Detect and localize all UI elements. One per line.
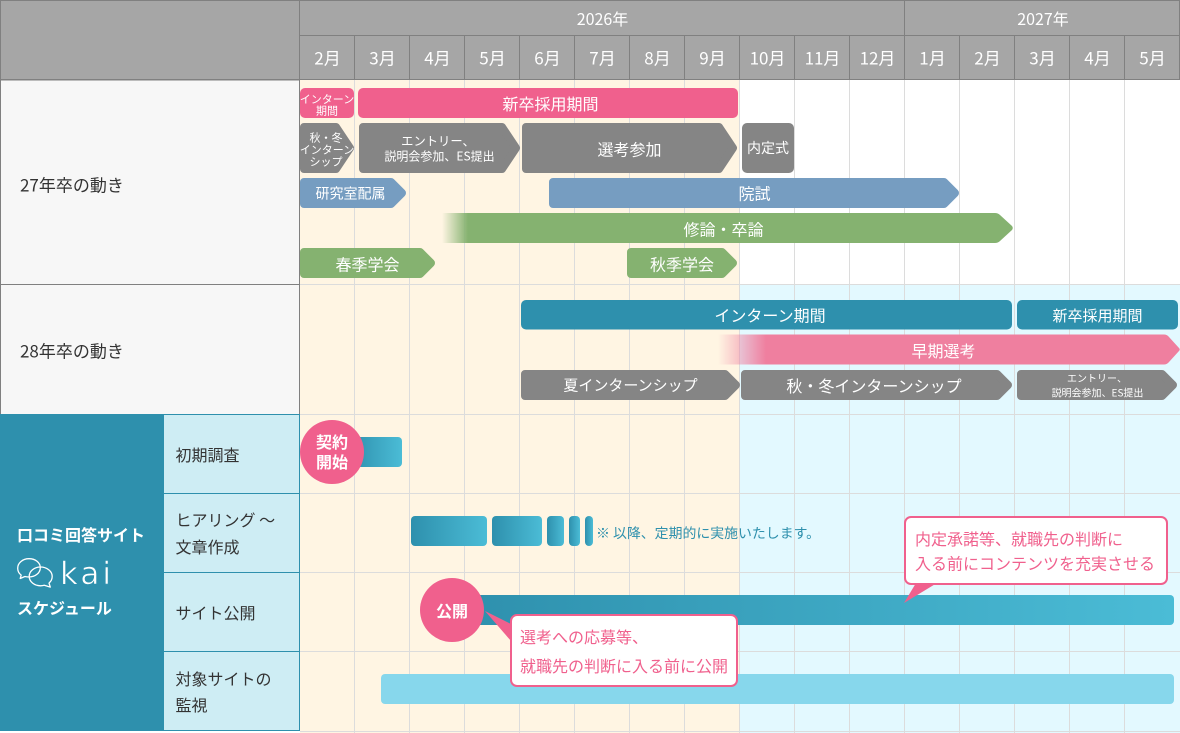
arrow: エントリー 説明会参加 27: エントリー、 — [401, 132, 475, 150]
table header: 6月 — [534, 44, 561, 70]
table header: 2月 — [974, 44, 1001, 70]
table header: 7月 — [589, 44, 616, 70]
panel: kai schedule task labels — [164, 414, 300, 731]
table header: 10月 — [750, 44, 785, 70]
row label: 28年卒の動き — [0, 284, 300, 414]
table header: 2026年 — [577, 6, 628, 30]
callout: 内定承諾等 — [904, 517, 1167, 603]
row label: 27年卒の動き — [0, 80, 300, 284]
bar: インターン期間 27 — [300, 88, 354, 118]
panel: kai schedule side label — [0, 414, 164, 731]
panel: kai schedule task labels: 監視 — [176, 692, 208, 716]
badge: 公開: 公開 — [436, 598, 468, 622]
callout: 選考への応募等: 就職先の判断に入る前に公開 — [520, 653, 728, 677]
arrow: 秋・冬インターンシップ 27: インターン — [300, 142, 354, 158]
arrow: 選考参加: 選考参加 — [597, 136, 662, 160]
arrow: 研究室配属 — [304, 182, 402, 204]
table header: 4月 — [424, 44, 451, 70]
arrow: 春季学会 — [304, 252, 431, 276]
bar: 監視 — [381, 674, 1174, 704]
icon: kai chat bubbles — [18, 559, 52, 587]
bar: 新卒採用期間 28: 新卒採用期間 — [1052, 305, 1143, 326]
arrow: 春季学会: 春季学会 — [335, 252, 400, 276]
bar: インターン期間 28: インターン期間 — [714, 302, 826, 326]
arrow: エントリー 説明会参加 28: 説明会参加、ES提出 — [1052, 384, 1143, 400]
callout: 選考への応募等: 選考への応募等、 — [520, 624, 648, 648]
panel: kai schedule side label: スケジュール — [17, 595, 112, 619]
callout: 内定承諾等: 内定承諾等、就職先の判断に — [915, 526, 1123, 550]
table header: 2月 — [314, 44, 341, 70]
table header: 3月 — [1029, 44, 1056, 70]
bar: インターン期間 27: インターン — [300, 91, 354, 107]
badge: 契約開始: 開始 — [316, 449, 348, 473]
arrow: 秋・冬インターンシップ 27: 秋・冬 — [310, 130, 342, 146]
arrow: 早期選考 — [718, 334, 1180, 364]
arrow: 秋・冬インターンシップ 28: 秋・冬インターンシップ — [786, 373, 962, 397]
bar: 新卒採用期間 27: 新卒採用期間 — [502, 91, 599, 115]
bar: インターン期間 27: 期間 — [316, 102, 338, 118]
panel: kai schedule task labels: 文章作成 — [176, 534, 240, 558]
arrow: 修論・卒論 — [442, 213, 1013, 243]
arrow: エントリー 説明会参加 28 — [1021, 370, 1173, 400]
bar: インターン期間 28 — [521, 300, 1012, 330]
row label: 28年卒の動き: 28年卒の動き — [20, 338, 124, 362]
table header: 4月 — [1084, 44, 1111, 70]
bar: サイト公開 — [460, 595, 1174, 625]
table header: 8月 — [644, 44, 671, 70]
arrow: 秋季学会: 秋季学会 — [650, 252, 714, 276]
table header: 3月 — [369, 44, 396, 70]
arrow: 夏インターンシップ — [525, 374, 736, 396]
arrow: 夏インターンシップ: 夏インターンシップ — [563, 374, 698, 396]
row label: 27年卒の動き: 27年卒の動き — [20, 172, 124, 196]
arrow: 早期選考: 早期選考 — [911, 338, 976, 362]
table header: 11月 — [805, 44, 840, 70]
panel: kai schedule side label: kai — [60, 556, 114, 592]
arrow: 秋・冬インターンシップ 27: シップ — [310, 154, 342, 170]
panel: kai schedule task labels: 初期調査 — [176, 442, 240, 466]
arrow: 研究室配属: 研究室配属 — [316, 184, 386, 204]
bar: 初期調査 — [350, 437, 402, 467]
panel: kai schedule task labels: サイト公開 — [176, 600, 256, 624]
arrow: 院試 — [553, 180, 955, 204]
callout: 内定承諾等: 入る前にコンテンツを充実させる — [915, 550, 1155, 574]
panel: kai schedule task labels: ヒアリング 〜 — [176, 507, 275, 531]
table header: 1月 — [919, 44, 946, 70]
arrow: 秋季学会 — [631, 252, 733, 276]
arrow: 修論・卒論: 修論・卒論 — [683, 216, 764, 240]
table header — [0, 0, 1180, 80]
callout: 選考への応募等 — [485, 611, 737, 686]
badge: 契約開始 — [300, 420, 364, 484]
arrow: 選考参加 — [526, 127, 733, 169]
panel: kai schedule task labels: 対象サイトの — [176, 666, 272, 690]
badge: 契約開始: 契約 — [316, 429, 348, 453]
table header: 5月 — [479, 44, 506, 70]
arrow: エントリー 説明会参加 27 — [363, 127, 516, 169]
table header: 5月 — [1139, 44, 1166, 70]
bars: ヒアリング — [411, 516, 593, 546]
bar: 新卒採用期間 28 — [1017, 300, 1178, 330]
arrow: 秋・冬インターンシップ 27 — [300, 127, 354, 170]
arrow: 院試: 院試 — [738, 180, 771, 204]
note: 以降定期的に実施: ※ 以降、定期的に実施いたします。 — [596, 523, 820, 543]
bar: 内定式 — [742, 123, 794, 173]
table header: 12月 — [860, 44, 895, 70]
arrow: エントリー 説明会参加 27: 説明会参加、ES提出 — [384, 148, 495, 164]
arrow: エントリー 説明会参加 28: エントリー、 — [1067, 370, 1127, 385]
table header: 2027年 — [1017, 6, 1069, 30]
bar: 新卒採用期間 27 — [358, 88, 738, 118]
bar: 内定式: 内定式 — [747, 138, 789, 158]
table header: 9月 — [699, 44, 726, 70]
arrow: 秋・冬インターンシップ 28 — [745, 373, 1008, 397]
panel: kai schedule side label: 口コミ回答サイト — [17, 522, 145, 546]
badge: 公開 — [420, 578, 484, 642]
